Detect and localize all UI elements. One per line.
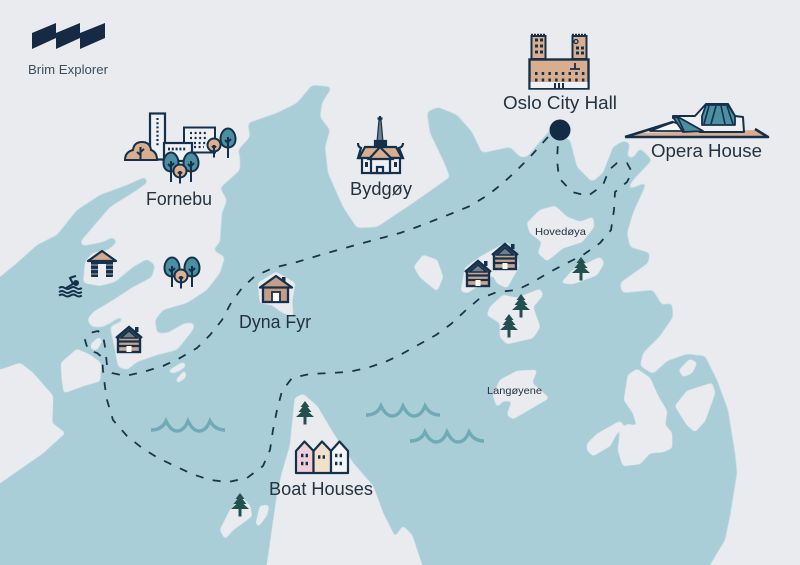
peninsula: Boat Houses bbox=[262, 394, 430, 565]
logo: Brim Explorer bbox=[28, 23, 109, 77]
icon: Dyna Fyr house bbox=[260, 276, 292, 302]
label: Opera House: Opera House bbox=[651, 140, 762, 161]
island: two pines bbox=[487, 289, 543, 344]
dashed boat route bbox=[85, 137, 632, 482]
logo mark bbox=[32, 23, 105, 49]
island: west rock bbox=[61, 349, 101, 393]
icon: open log cabin bbox=[88, 251, 116, 278]
island: white rocks bbox=[168, 362, 186, 373]
icon: Bydgoy church bbox=[358, 116, 403, 173]
label: Hovedoya: Hovedøya bbox=[535, 226, 586, 238]
waves bbox=[151, 406, 484, 442]
icon: Oslo City Hall bbox=[530, 35, 588, 88]
logo wordmark: Brim Explorer bbox=[28, 62, 109, 77]
island: spit east bbox=[587, 421, 624, 456]
island: white rocks south bbox=[176, 370, 186, 383]
icon: island cabins bbox=[465, 244, 518, 286]
land and islands bbox=[0, 206, 715, 565]
island: Hovedoya bbox=[527, 206, 594, 261]
icon: Fornebu buildings and trees bbox=[125, 114, 236, 184]
island: pine east bbox=[561, 257, 604, 284]
island: south sliver bbox=[256, 505, 269, 527]
island: cabins bbox=[461, 242, 519, 293]
label: Langoyene: Langøyene bbox=[487, 385, 542, 397]
water bbox=[0, 85, 737, 565]
label: Fornebu: Fornebu bbox=[146, 188, 212, 209]
icon: pine trees bbox=[231, 257, 590, 516]
island: small west of cabins bbox=[414, 255, 443, 291]
island: large east bbox=[618, 369, 672, 466]
island: Dyna Fyr bbox=[258, 272, 295, 316]
icon: swimmer bbox=[59, 276, 82, 296]
icon: Boat Houses bbox=[296, 442, 348, 473]
icon: cabin west bbox=[116, 327, 142, 352]
icon: trees south of Fornebu bbox=[164, 258, 200, 288]
island: small bay bbox=[679, 359, 697, 377]
island: Langoyene bbox=[493, 370, 549, 419]
label: Dyna Fyr: Dyna Fyr bbox=[239, 312, 311, 332]
icon: Opera House bbox=[625, 104, 768, 137]
island: tiny bbox=[91, 337, 102, 350]
label: Boat Houses: Boat Houses bbox=[269, 478, 373, 499]
island: right bay bbox=[675, 383, 715, 432]
route start marker bbox=[550, 120, 570, 140]
label: Oslo City Hall: Oslo City Hall bbox=[503, 92, 617, 113]
label: Bydgoy: Bydgøy bbox=[350, 178, 413, 199]
land: west shore bbox=[0, 363, 65, 495]
island: south tree bbox=[220, 497, 252, 539]
